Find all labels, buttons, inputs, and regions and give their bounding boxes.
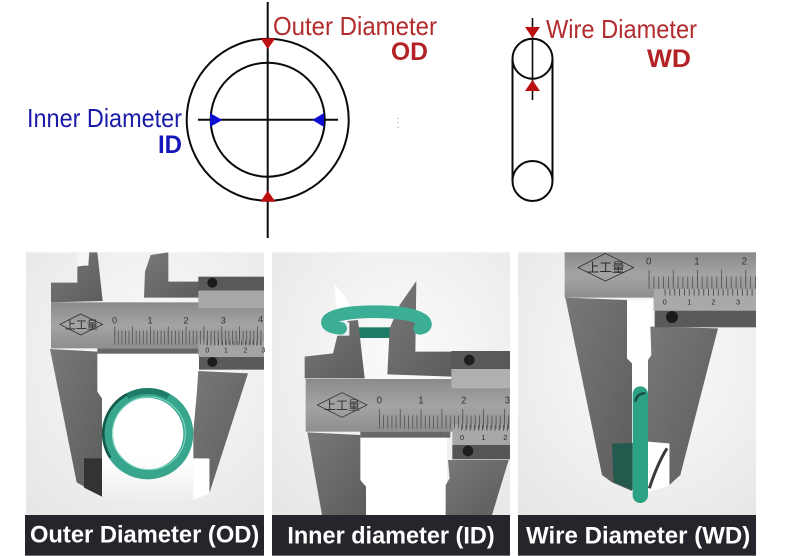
ruler numbers — [377, 396, 510, 407]
logo: 上工量 — [324, 399, 360, 413]
vernier numbers: 1 — [687, 297, 691, 306]
ruler numbers: 1 — [694, 256, 700, 267]
vernier numbers: 0 — [205, 347, 209, 354]
photo background — [26, 252, 264, 515]
bottom wire circle — [512, 161, 552, 201]
vernier ticks — [461, 419, 510, 437]
label: ID: ID — [158, 131, 182, 159]
white gap between jaws — [627, 300, 652, 447]
arrow: wire bottom — [525, 80, 540, 91]
speck marks — [397, 118, 399, 128]
main beam — [306, 379, 510, 432]
ruler ticks — [379, 415, 510, 422]
top wire circle — [512, 39, 552, 79]
white reflection — [193, 459, 209, 500]
white reflection — [648, 442, 669, 492]
ring side lines — [512, 59, 552, 181]
vernier ticks — [207, 336, 264, 350]
beam — [565, 252, 756, 298]
logo: 上工量 — [65, 318, 98, 331]
arrow: outer diameter bottom — [260, 191, 276, 202]
logo: 上工量 — [587, 261, 625, 275]
slider bottom dark — [199, 357, 264, 370]
main beam — [51, 302, 264, 348]
lower right jaw — [446, 460, 509, 515]
right jaw — [648, 327, 718, 485]
white gap between jaws — [360, 437, 447, 515]
ruler numbers — [646, 256, 747, 267]
wire axis — [532, 18, 534, 100]
upper right jaw — [144, 252, 200, 298]
left jaw — [565, 298, 632, 491]
caption bar — [518, 515, 756, 556]
label: outer diameter: Outer Diameter — [273, 11, 437, 41]
ring top shadow — [635, 393, 645, 402]
white gap between jaws — [97, 352, 199, 502]
vernier numbers: 0 — [663, 297, 667, 306]
vernier numbers — [460, 433, 507, 442]
vernier numbers: 2 — [503, 433, 507, 442]
ruler numbers: 0 — [377, 396, 382, 407]
vernier numbers: 0 — [460, 433, 464, 442]
dark jaw patch — [84, 458, 102, 497]
bolts — [207, 278, 217, 367]
logo — [578, 253, 634, 281]
ruler numbers: 0 — [646, 256, 651, 267]
label: WD: WD — [647, 45, 691, 73]
vernier scale plate — [198, 340, 264, 357]
dark green reflection — [612, 443, 633, 490]
ruler numbers: 3 — [221, 315, 226, 325]
ruler ticks — [649, 277, 756, 283]
caption bar — [25, 515, 264, 556]
slider top light — [451, 369, 510, 388]
upper left jaw — [305, 320, 365, 378]
photo background — [518, 252, 756, 515]
horizontal axis — [198, 119, 338, 121]
caption: Inner diameter (ID) — [287, 523, 495, 550]
inner circle — [211, 63, 325, 177]
ruler numbers: 3 — [505, 396, 510, 407]
lower left jaw — [50, 349, 102, 497]
panel: ring diagram — [27, 2, 437, 238]
beam lower shadow — [360, 432, 450, 438]
vernier numbers: 1 — [481, 433, 485, 442]
lower right jaw — [193, 371, 248, 493]
ruler ticks — [114, 332, 264, 338]
outer circle — [187, 39, 349, 201]
arrow: inner diameter left — [210, 113, 222, 127]
caption: Wire Diameter (WD) — [526, 523, 750, 550]
ruler numbers — [112, 314, 263, 325]
vernier numbers: 2 — [243, 347, 247, 354]
ruler numbers: 2 — [183, 315, 188, 325]
vernier ticks — [665, 282, 756, 302]
back of ring — [358, 327, 393, 338]
arrow: outer diameter top — [260, 38, 276, 49]
slider top light — [198, 291, 264, 308]
vernier numbers: 2 — [711, 297, 715, 306]
green o-ring — [103, 391, 188, 474]
slider dark — [655, 311, 756, 327]
panel: wire diagram — [512, 14, 697, 201]
label: wire diameter: Wire Diameter — [546, 14, 697, 44]
vernier numbers — [205, 347, 265, 354]
logo — [317, 393, 367, 417]
panel: inner diameter photo — [272, 252, 510, 556]
white tip — [77, 252, 88, 266]
arrow: wire top — [525, 27, 540, 38]
panel: wire diameter photo — [518, 252, 756, 556]
label: inner diameter: Inner Diameter — [27, 103, 182, 133]
vernier numbers — [663, 297, 740, 306]
ruler numbers: 4 — [258, 314, 263, 324]
photo background — [272, 252, 510, 515]
bolts — [463, 355, 475, 456]
ruler numbers: 0 — [112, 315, 117, 325]
bolt — [666, 311, 678, 323]
ruler numbers: 2 — [461, 396, 466, 407]
green o-ring edge — [633, 386, 648, 503]
vernier numbers: 3 — [261, 347, 265, 354]
green o-ring front — [327, 312, 425, 328]
vernier numbers: 3 — [736, 297, 740, 306]
vernier plate — [654, 289, 756, 311]
arrow: inner diameter right — [312, 113, 324, 127]
fuzzy shadow — [649, 448, 667, 488]
lower left jaw — [307, 432, 366, 515]
ruler numbers: 1 — [418, 396, 424, 407]
vernier plate — [452, 424, 510, 445]
logo — [60, 314, 103, 335]
upper left jaw — [51, 252, 103, 302]
vernier numbers: 1 — [224, 347, 228, 354]
label: OD: OD — [391, 38, 428, 66]
slider top dark — [198, 277, 264, 291]
ruler numbers: 2 — [742, 256, 747, 267]
white tip — [335, 284, 351, 310]
ruler numbers: 1 — [147, 315, 152, 325]
vertical axis — [267, 2, 269, 238]
panel: outer diameter photo — [25, 252, 265, 556]
upper right jaw — [387, 281, 452, 377]
slider bottom dark — [452, 445, 510, 459]
beam lower shadow — [97, 348, 199, 354]
slider top dark — [451, 351, 510, 369]
white reflection — [335, 322, 349, 336]
caption: Outer Diameter (OD) — [30, 522, 259, 549]
caption bar — [272, 515, 510, 556]
